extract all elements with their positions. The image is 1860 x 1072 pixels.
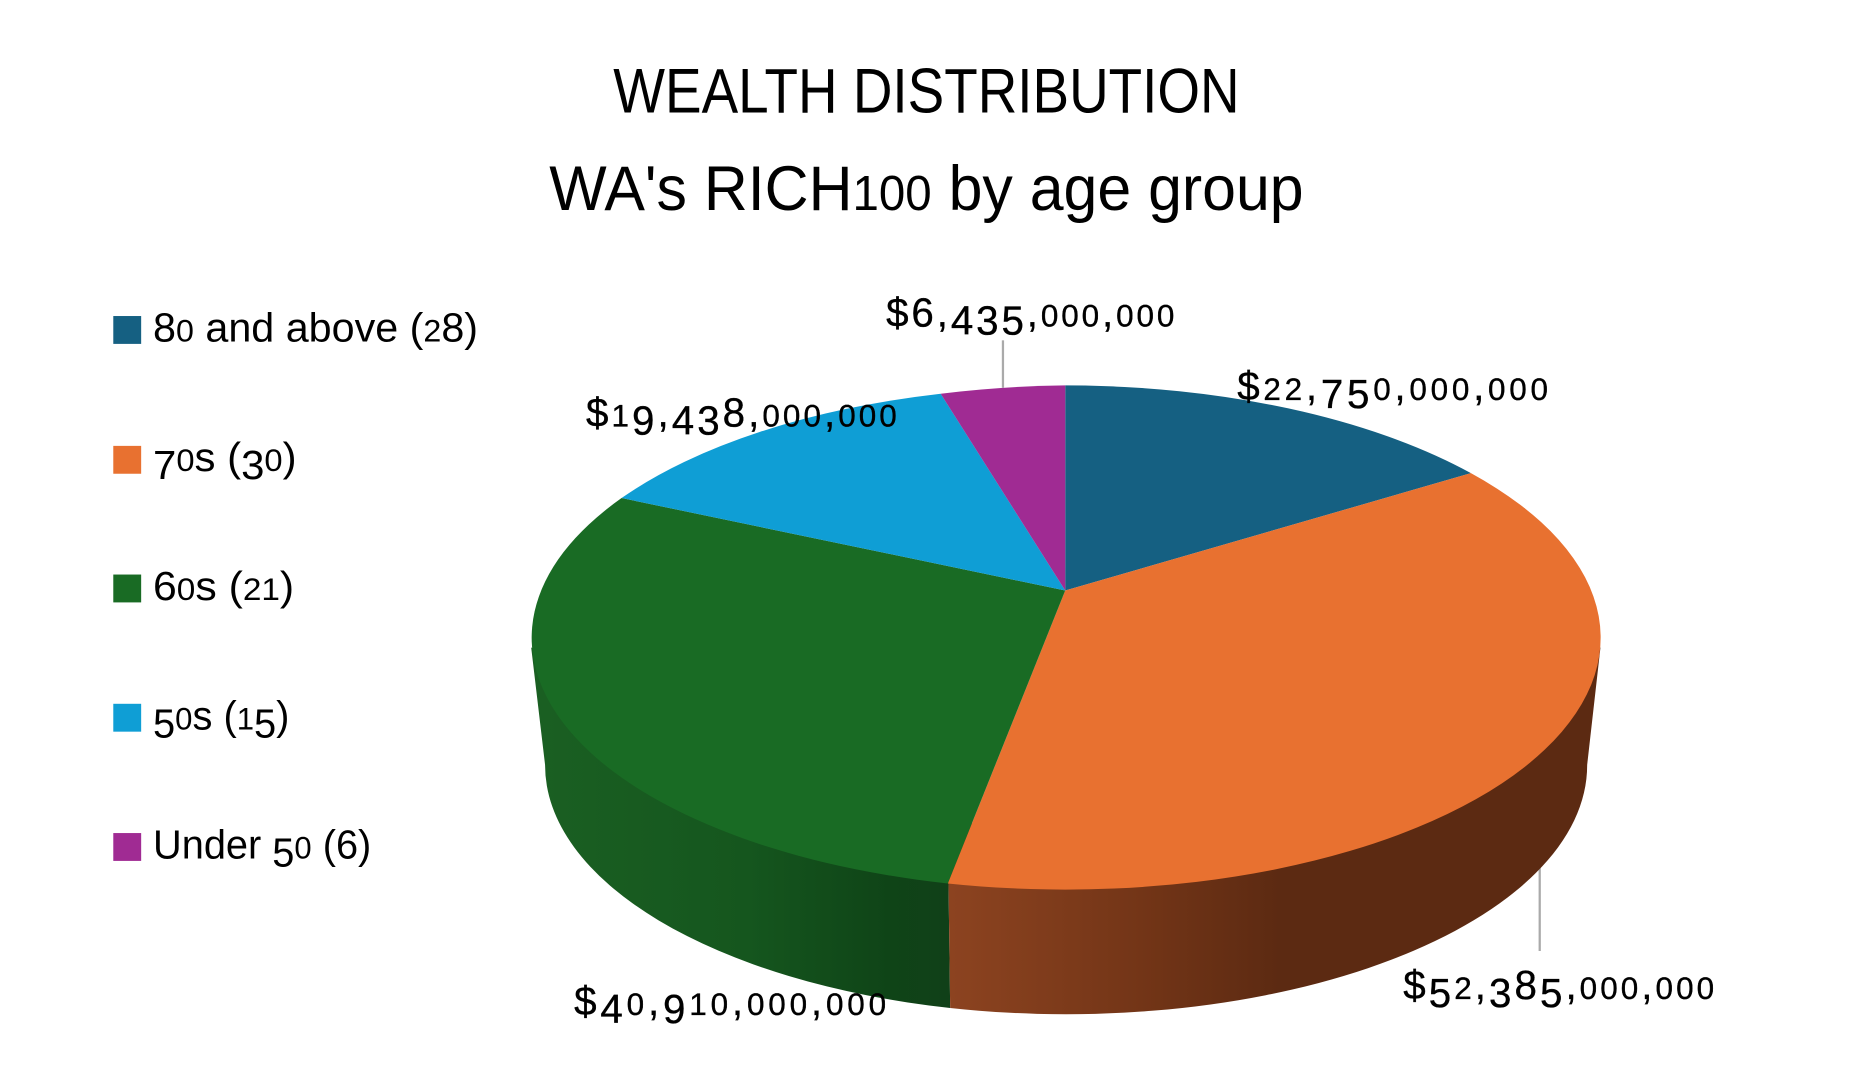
- pie side: 70s: [948, 647, 1600, 1014]
- data label: 60s: $40,910,000,000: [574, 978, 886, 1032]
- pie side: 60s: [531, 647, 950, 1008]
- slice: 60s: [532, 498, 1065, 883]
- legend item: 80 and above: 80 and above (28): [153, 305, 478, 351]
- legend item: 60s: 60s (21): [153, 563, 294, 609]
- legend item: under 50: Under 50 (6): [153, 822, 371, 876]
- title line 1: WEALTH DISTRIBUTION: [613, 57, 1240, 127]
- title: [549, 57, 1304, 224]
- slice: 70s: [948, 473, 1601, 890]
- 3D pie chart: [531, 385, 1601, 1014]
- data label: 70s: $52,385,000,000: [1403, 962, 1714, 1016]
- slice: 80 and above: [1065, 385, 1471, 591]
- data label: 50s: $19,438,000,000: [586, 389, 897, 443]
- data label: 80 and above: $22,750,000,000: [1237, 363, 1548, 417]
- title line 2: WA's RICH100 by age group: [549, 154, 1304, 224]
- legend item: 70s: 70s (30): [153, 434, 297, 488]
- slice: under 50: [941, 385, 1065, 591]
- slice: 50s: [622, 394, 1065, 591]
- leader line: under 50 label: [1002, 340, 1004, 388]
- data label: under 50: $6,435,000,000: [886, 290, 1174, 344]
- legend: [113, 305, 478, 876]
- leader line: 70s label: [1539, 856, 1541, 951]
- legend item: 50s: 50s (15): [153, 692, 289, 746]
